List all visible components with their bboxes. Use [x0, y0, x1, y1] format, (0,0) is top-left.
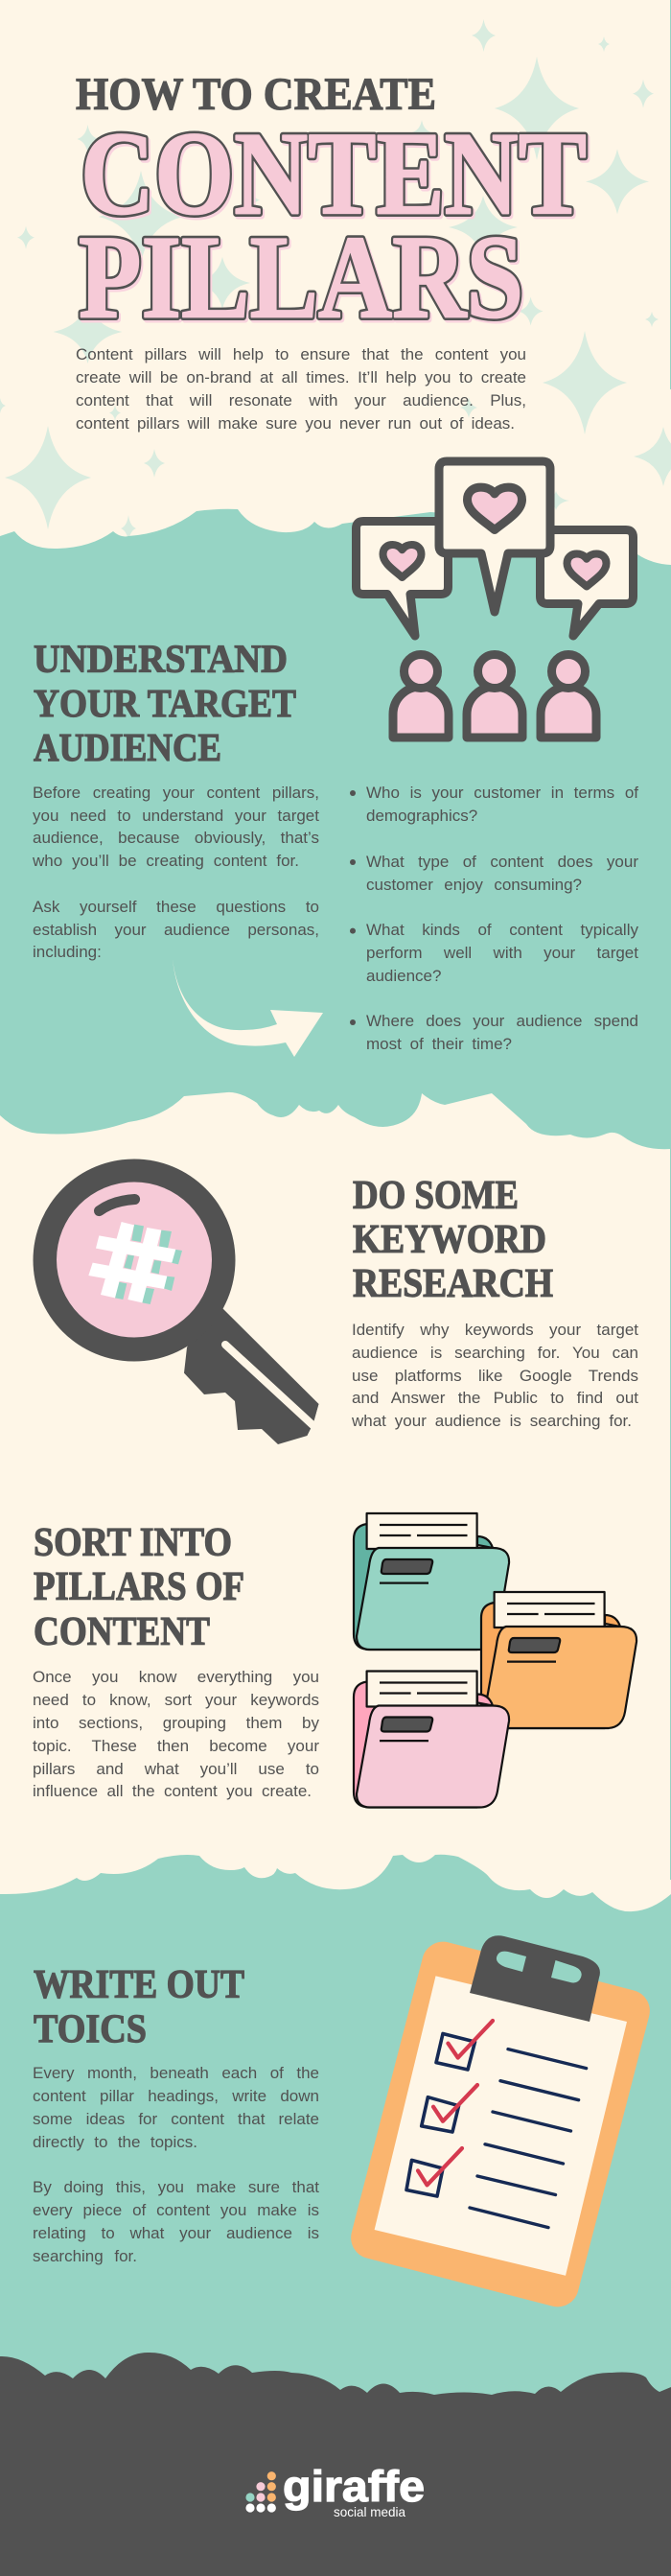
logo dots	[245, 2471, 276, 2513]
icon: clipboard checklist	[346, 1935, 655, 2311]
lens highlight	[100, 1199, 135, 1211]
icon: orange folder	[481, 1592, 636, 1728]
teal band: understand your audience	[0, 509, 671, 1149]
text: audience intro: you need to understand your target	[33, 807, 319, 825]
logo wordmark: giraffe	[283, 2462, 425, 2511]
title: content: CONTENT	[81, 107, 587, 240]
arrow: curved cream arrow	[173, 959, 323, 1057]
heading: write out toics	[34, 1963, 244, 2052]
heading: do some keyword research: RESEARCH	[353, 1262, 553, 1306]
intro paragraph	[76, 345, 526, 433]
icon: three people	[393, 654, 596, 738]
intro paragraph: Content pillars will help to ensure that the content you	[76, 345, 526, 363]
clipboard paper	[375, 1976, 627, 2276]
teal band: write out topics	[0, 1855, 671, 2398]
clip holes	[497, 1952, 582, 1982]
lens ring	[33, 1159, 236, 1362]
text: keyword research: use platforms like Google Trends	[352, 1367, 638, 1385]
text: sort into pillars: into sections, grouping them by	[33, 1714, 319, 1732]
text: audience intro: who you’ll be creating content for.	[33, 852, 299, 870]
clipboard clip	[470, 1935, 600, 2022]
icon: magnifying glass key with hashtag	[33, 1159, 331, 1448]
heading: sort into pillars of content: CONTENT	[34, 1610, 210, 1654]
bulleted questions: What type of content does your	[366, 853, 638, 871]
middle heart	[468, 487, 521, 529]
left bubble	[357, 522, 449, 636]
text: write out topics: some ideas for content that relate	[33, 2110, 319, 2128]
key handle	[184, 1295, 319, 1444]
text: keyword research: what your audience is searching for.	[352, 1412, 632, 1430]
icon: speech bubbles with hearts	[357, 461, 633, 636]
text: audience intro: including:	[33, 943, 102, 961]
clipboard board	[346, 1937, 655, 2311]
sparkle background	[0, 19, 671, 542]
heading: do some keyword research	[353, 1174, 553, 1306]
heading: write out toics: TOICS	[34, 2008, 147, 2052]
bulleted questions: audience?	[366, 967, 441, 985]
title: how to create: HOW TO CREATE	[76, 69, 436, 120]
bulleted questions: perform well with your target	[366, 944, 638, 962]
heading: understand your target audience: YOUR TARGET	[34, 681, 296, 725]
bulleted questions: Who is your customer in terms of	[366, 784, 638, 802]
text: sort into pillars	[33, 1668, 319, 1800]
text: write out topics: searching for.	[33, 2247, 137, 2265]
bulleted questions: customer enjoy consuming?	[366, 876, 582, 894]
text: sort into pillars: influence all the content you create.	[33, 1782, 312, 1800]
bulleted questions: Where does your audience spend	[366, 1012, 638, 1030]
title: content: CONTENT	[82, 110, 589, 242]
heading: understand your target audience: AUDIENCE	[34, 725, 221, 769]
checkboxes	[406, 2033, 475, 2196]
heading: sort into pillars of content	[34, 1521, 244, 1654]
text: audience intro: establish your audience personas,	[33, 921, 319, 939]
right heart	[567, 553, 606, 587]
heading: understand your target audience: UNDERSTAND	[34, 637, 288, 681]
text: write out topics: relating to what your audience is	[33, 2224, 319, 2242]
text: sort into pillars: topic. These then become your	[33, 1737, 319, 1755]
bullet markers	[350, 790, 356, 1025]
title: content: CONTENT	[81, 107, 587, 240]
right bubble	[541, 529, 633, 636]
text: sort into pillars: need to know, sort your keywords	[33, 1691, 319, 1709]
left heart	[383, 545, 422, 577]
checklist lines	[470, 2049, 587, 2228]
intro paragraph: content that will resonate with your audience. Plus,	[76, 391, 526, 410]
text: keyword research: and Answer the Public to find out	[352, 1389, 638, 1407]
bulleted questions: most of their time?	[366, 1035, 512, 1053]
title: pillars: PILLARS	[81, 214, 525, 345]
text: keyword research: Identify why keywords your target	[352, 1321, 638, 1339]
heading: do some keyword research: DO SOME	[353, 1174, 519, 1218]
text: audience intro: Before creating your content pillars,	[33, 784, 319, 802]
intro paragraph: content pillars will make sure you never run out of ideas.	[76, 414, 515, 433]
check marks	[418, 2021, 493, 2185]
bulleted questions: What kinds of content typically	[366, 921, 638, 939]
title: pillars: PILLARS	[79, 211, 523, 343]
title: pillars: PILLARS	[79, 211, 523, 343]
heading: sort into pillars of content: SORT INTO	[34, 1521, 232, 1565]
lens	[57, 1182, 212, 1337]
text: keyword research: audience is searching for. You can	[352, 1344, 638, 1362]
text: write out topics: directly to the topics.	[33, 2133, 197, 2151]
text: write out topics: content pillar headings, write down	[33, 2087, 319, 2105]
icon: teal folder	[354, 1513, 509, 1650]
text: audience intro	[33, 784, 319, 961]
heading: do some keyword research: KEYWORD	[353, 1218, 546, 1262]
intro paragraph: create will be on-brand at all times. It’ll help you to create	[76, 368, 526, 386]
text: write out topics: every piece of content you make is	[33, 2201, 319, 2219]
text: keyword research	[352, 1321, 638, 1430]
middle bubble	[439, 461, 550, 612]
text: sort into pillars: Once you know everything you	[33, 1668, 319, 1686]
text: write out topics: Every month, beneath each of the	[33, 2064, 319, 2082]
bulleted questions	[366, 784, 638, 1053]
logo tagline: social media	[334, 2504, 405, 2519]
text: write out topics: By doing this, you make sure that	[33, 2178, 319, 2196]
heading: sort into pillars of content: PILLARS OF	[34, 1565, 244, 1609]
logo: giraffe social media	[245, 2462, 425, 2519]
text: sort into pillars: pillars and what you’ll use to	[33, 1760, 319, 1778]
hashtag	[88, 1222, 182, 1304]
heading: write out toics: WRITE OUT	[34, 1963, 244, 2007]
text: audience intro: audience, because obviously, that’s	[33, 829, 319, 847]
heading: understand your target audience	[34, 637, 296, 769]
key slit	[225, 1345, 321, 1433]
text: write out topics	[33, 2064, 319, 2265]
bulleted questions: demographics?	[366, 807, 477, 825]
icon: pink folder	[354, 1671, 509, 1807]
dark footer band	[0, 2353, 671, 2576]
text: audience intro: Ask yourself these questions to	[33, 898, 319, 916]
